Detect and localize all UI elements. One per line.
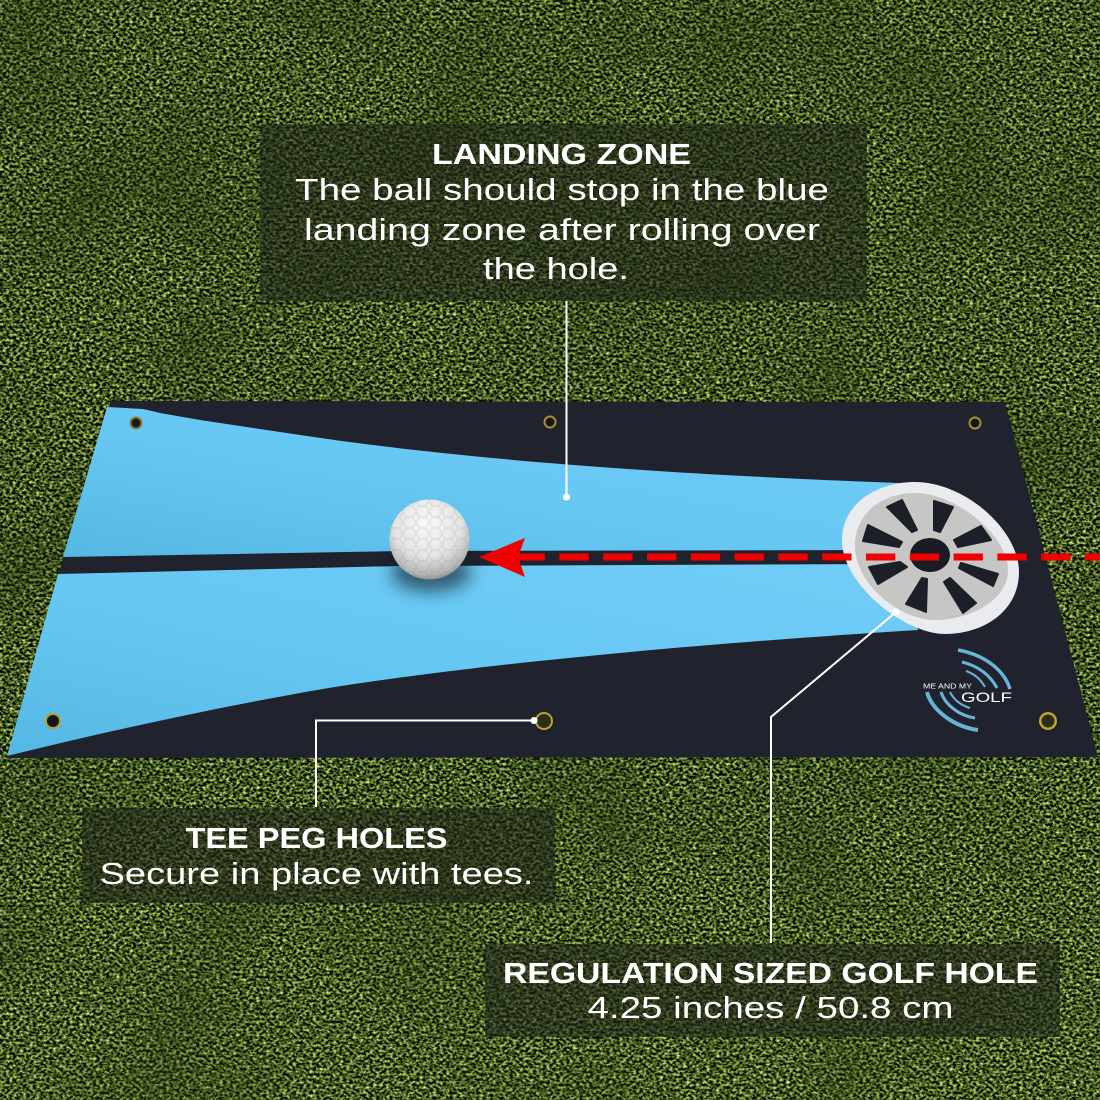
logo: Me and My Golf [923, 650, 1012, 730]
description: the hole. [483, 251, 629, 286]
hole cup [855, 493, 1008, 620]
eyelet: bottom right [1039, 712, 1057, 730]
golf ball [390, 500, 471, 592]
logo: Me and My Golf: GOLF [961, 689, 1012, 705]
hole rim [842, 482, 1019, 634]
description: landing zone after rolling over [304, 212, 820, 247]
eyelet: bottom left [45, 713, 61, 729]
leader line: golf hole [771, 608, 900, 943]
golf hole insert [842, 482, 1019, 634]
putting line arrow [479, 538, 1100, 577]
panel: regulation sized golf hole [485, 944, 1060, 1037]
dashed line [515, 554, 1100, 560]
mat base [7, 401, 1098, 758]
panel: tee peg holes [82, 808, 555, 903]
description: Secure in place with tees. [100, 856, 534, 891]
heading: LANDING ZONE [432, 139, 691, 171]
ball body [390, 500, 470, 580]
eyelet: bottom middle [535, 712, 553, 730]
hole slots [863, 500, 998, 613]
ball shadow [391, 552, 471, 592]
description: The ball should stop in the blue [295, 172, 829, 207]
lower blue landing zone [7, 564, 918, 756]
eyelet: top middle [544, 416, 556, 428]
hole centre [910, 538, 950, 572]
arrow head [479, 538, 525, 577]
eyelet: top left [130, 416, 142, 430]
upper blue landing zone [63, 407, 900, 557]
logo arcs [927, 650, 1010, 730]
heading: TEE PEG HOLES [186, 823, 448, 855]
golf putting mat [7, 401, 1098, 758]
panel: landing zone [260, 124, 867, 301]
heading: REGULATION SIZED GOLF HOLE [503, 958, 1038, 990]
logo text: ME AND MY [923, 684, 972, 690]
leader line: landing zone [563, 301, 570, 500]
description: 4.25 inches / 50.8 cm [588, 990, 954, 1025]
eyelet: top right [968, 416, 982, 430]
leader line: tee peg holes [316, 717, 538, 807]
description [295, 172, 829, 286]
